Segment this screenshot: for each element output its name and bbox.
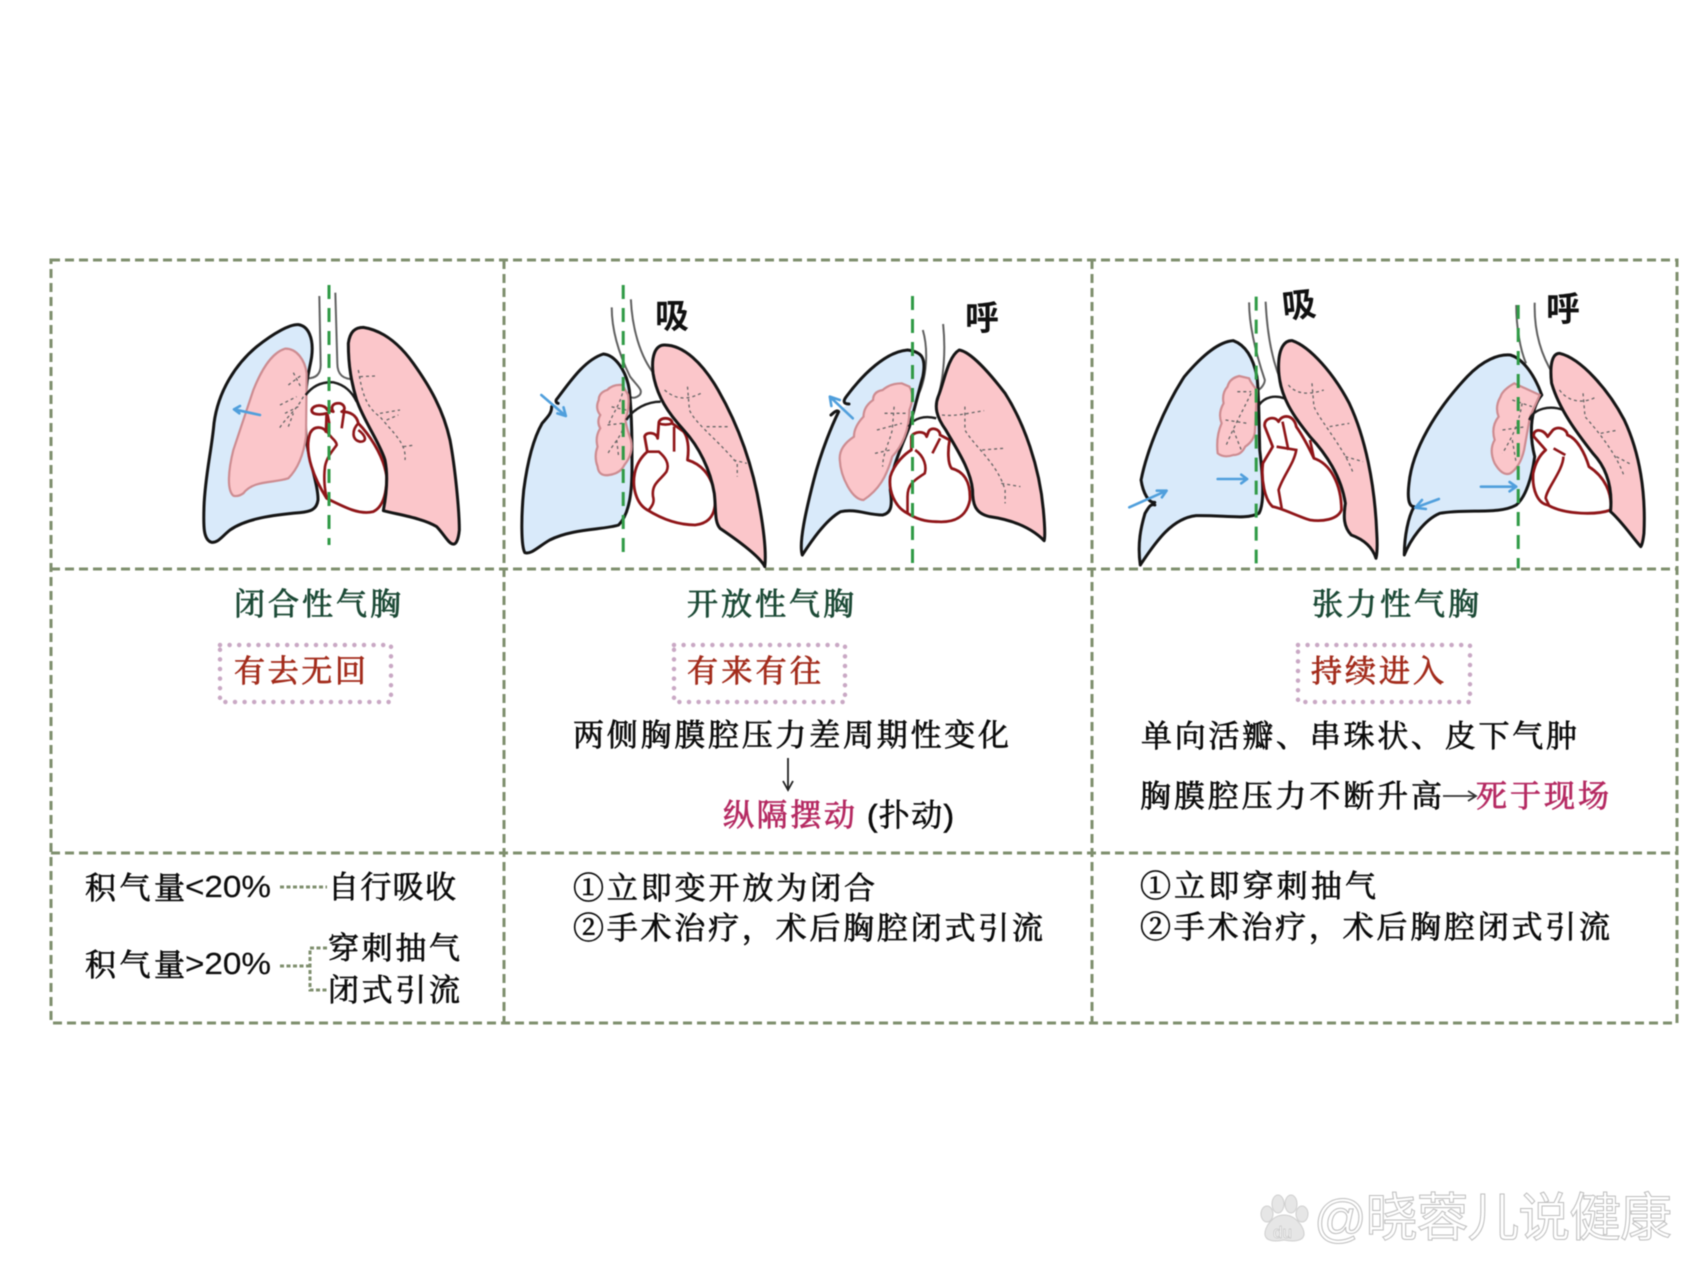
midline [1517, 305, 1520, 568]
diagram: open pneumothorax exhale [801, 296, 1045, 568]
text: open pneumothorax mechanism: (扑动) [867, 798, 954, 833]
treatment: closed pneumothorax: 积气量 [85, 948, 185, 983]
left airways [279, 373, 303, 428]
callout: open [674, 645, 845, 702]
handwritten label: inhale (tension): 吸 [1280, 285, 1318, 327]
treatment: open pneumothorax: ②手术治疗，术后胸腔闭式引流 [573, 911, 1043, 946]
arrow: leads to [1443, 791, 1476, 801]
trachea [909, 324, 944, 425]
trachea [1516, 303, 1554, 375]
heart chambers [1277, 422, 1314, 508]
affected lung cavity [801, 350, 924, 555]
right airways [942, 407, 1020, 503]
arrow: air in [1129, 491, 1167, 507]
midline [911, 296, 914, 568]
text: tension pneumothorax mechanism: 死于现场 [1476, 779, 1609, 814]
collapsed lung [1492, 383, 1540, 474]
mediastinum arc [909, 417, 936, 427]
heart [634, 418, 715, 525]
callout: closed [220, 645, 391, 702]
icon: paw logo [1261, 1195, 1308, 1241]
right airways [358, 370, 415, 460]
midline [622, 285, 625, 558]
title: open pneumothorax: 开放性气胸 [687, 587, 854, 622]
heart [1533, 428, 1611, 513]
treatment: closed pneumothorax: 穿刺抽气 [328, 931, 460, 966]
mediastinum arc [306, 382, 357, 402]
text: tension pneumothorax mechanism: 单向活瓣、串珠状、皮下气肿 [1141, 719, 1577, 754]
right lung [1279, 341, 1377, 558]
callout: tension [1298, 645, 1470, 702]
treatment: closed pneumothorax: >20% [185, 946, 271, 981]
diagram: closed pneumothorax [204, 285, 459, 545]
collapsed lung [1217, 376, 1257, 456]
heart chambers [647, 423, 674, 511]
mediastinum arc [626, 402, 661, 420]
trachea [1249, 302, 1281, 390]
right lung [653, 345, 765, 567]
text: tension pneumothorax mechanism: 胸膜腔压力不断升高 [1140, 779, 1442, 814]
arrow: mediastinum push [1218, 475, 1247, 483]
heart chambers [908, 438, 940, 513]
heart chambers [1546, 448, 1565, 505]
trachea [307, 293, 355, 379]
text: open pneumothorax mechanism: 两侧胸膜腔压力差周期性变化 [573, 718, 1009, 753]
heart [1262, 416, 1341, 521]
left airways [1503, 400, 1532, 463]
arrow: air flow [234, 406, 260, 415]
treatment: tension pneumothorax [1140, 869, 1610, 945]
right lung [1551, 353, 1644, 547]
affected lung cavity [204, 325, 318, 542]
midline [1255, 297, 1258, 563]
treatment: closed pneumothorax: <20% [185, 869, 271, 904]
treatment: closed pneumothorax: 积气量 [85, 871, 185, 906]
treatment: open pneumothorax: ①立即变开放为闭合 [573, 871, 875, 906]
right lung [936, 350, 1045, 541]
collapsed lung [840, 383, 912, 500]
comparison table grid [51, 260, 1677, 1023]
mediastinum arc [1259, 397, 1284, 405]
left airways [1226, 392, 1251, 450]
title: closed pneumothorax: 闭合性气胸 [234, 587, 401, 622]
right lung [348, 327, 459, 544]
heart [890, 429, 970, 522]
callout: open: 有来有往 [687, 654, 821, 689]
text: open pneumothorax mechanism: 纵隔摆动 [723, 798, 855, 833]
handwritten label: exhale (open): 呼 [965, 300, 999, 338]
left airways [607, 393, 626, 457]
treatment: closed pneumothorax [85, 869, 460, 1008]
left airways [875, 407, 908, 467]
affected lung cavity [1139, 341, 1263, 565]
callout: closed: 有去无回 [234, 654, 366, 689]
diagram: open pneumothorax inhale [522, 285, 765, 567]
title: tension pneumothorax: 张力性气胸 [1312, 587, 1479, 622]
mediastinum arc [1529, 408, 1563, 420]
handwritten label: exhale (tension): 呼 [1546, 291, 1580, 329]
treatment: tension pneumothorax: ②手术治疗，术后胸腔闭式引流 [1140, 910, 1610, 945]
treatment: closed pneumothorax: 自行吸收 [328, 870, 456, 905]
arrow: air out [830, 397, 853, 418]
diagram: tension pneumothorax inhale [1129, 297, 1377, 565]
treatment: tension pneumothorax: ①立即穿刺抽气 [1140, 869, 1376, 904]
handwritten label: inhale (open): 吸 [655, 298, 689, 336]
arrow: leads to [783, 758, 793, 790]
collapsed lung [229, 349, 307, 496]
heart [308, 403, 387, 513]
text: open pneumothorax mechanism [573, 718, 1009, 833]
heart chambers [324, 412, 365, 498]
affected lung cavity [522, 354, 632, 553]
collapsed lung [596, 385, 632, 475]
treatment: open pneumothorax [573, 871, 1043, 946]
arrow: air out [1415, 499, 1439, 509]
trachea [612, 299, 655, 398]
affected lung cavity [1404, 355, 1542, 555]
midline [327, 285, 330, 545]
arrow: air in [541, 395, 566, 416]
treatment: closed pneumothorax: 闭式引流 [328, 973, 460, 1008]
watermark: du [1273, 1223, 1292, 1242]
right airways [1559, 390, 1632, 477]
text: tension pneumothorax mechanism [1140, 719, 1609, 814]
right airways [665, 387, 747, 477]
diagram: tension pneumothorax exhale [1404, 303, 1644, 568]
callout: tension: 持续进入 [1311, 654, 1444, 689]
watermark: @晓蓉儿说健康 [1314, 1190, 1672, 1248]
right airways [1288, 383, 1363, 473]
arrow: mediastinum push [1481, 482, 1516, 491]
